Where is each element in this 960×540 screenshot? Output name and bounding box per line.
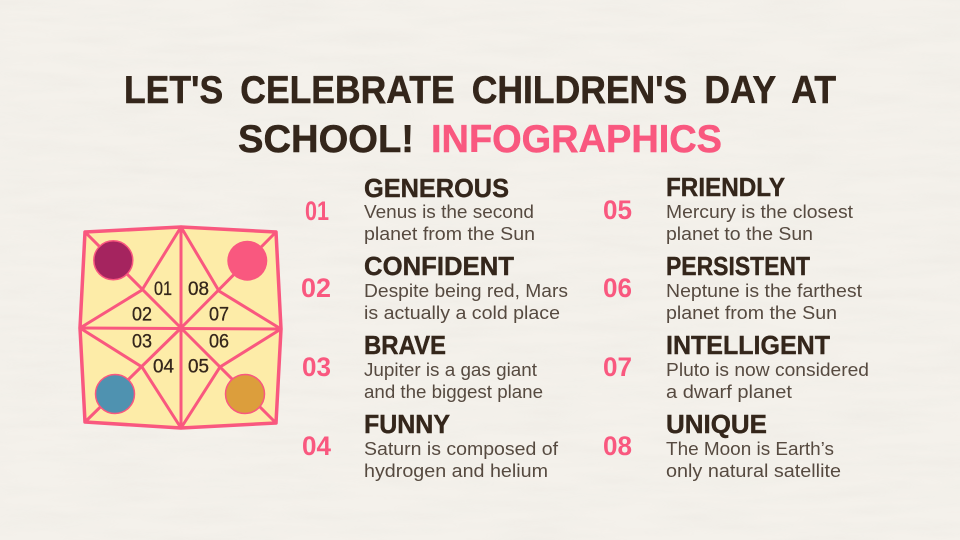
item 08: unique: 08 (603, 431, 632, 461)
item 02: confident: is actually a cold place (364, 302, 560, 323)
diagram numbers: 02 (132, 304, 152, 326)
item 04: funny: FUNNY (364, 409, 450, 439)
item 01: generous: GENEROUS (364, 173, 509, 203)
item 08: unique: The Moon is Earth’s (666, 438, 834, 459)
item 05: friendly (603, 172, 853, 244)
icon: blue circle (96, 374, 134, 414)
title: INFOGRAPHICS (431, 118, 722, 161)
diagram numbers: 04 (153, 356, 174, 378)
item 08: unique: only natural satellite (666, 460, 841, 481)
item 04: funny: hydrogen and helium (364, 460, 548, 481)
item 02: confident: Despite being red, Mars (364, 280, 568, 301)
icon: pink circle (227, 241, 267, 281)
title: LET'S CELEBRATE CHILDREN'S DAY AT (124, 69, 836, 112)
item 08: unique: UNIQUE (666, 409, 767, 439)
icon: orange circle (226, 374, 264, 414)
diagram numbers: 08 (188, 279, 209, 300)
title (124, 69, 836, 161)
item 01: generous: 01 (305, 196, 329, 226)
item 04: funny (302, 409, 559, 481)
item 02: confident: CONFIDENT (364, 251, 514, 281)
item 06: persistent: PERSISTENT (666, 251, 810, 281)
item 03: brave: Jupiter is a gas giant (364, 359, 537, 380)
item 06: persistent: planet from the Sun (666, 302, 837, 323)
item 06: persistent: 06 (603, 273, 632, 303)
item 03: brave (302, 330, 543, 402)
item 06: persistent: Neptune is the farthest (666, 280, 862, 301)
item 08: unique (603, 409, 841, 481)
item 07: intelligent: 07 (603, 352, 632, 382)
item 07: intelligent: Pluto is now considered (666, 359, 869, 380)
item 01: generous: Venus is the second (364, 201, 534, 222)
diagram numbers: 03 (132, 332, 152, 352)
item 01: generous: planet from the Sun (364, 223, 535, 244)
fold lines (80, 227, 281, 428)
icon: purple circle (94, 241, 133, 280)
item 02: confident: 02 (301, 273, 331, 303)
item 05: friendly: FRIENDLY (666, 172, 785, 202)
item 01: generous (305, 173, 535, 244)
item 05: friendly: planet to the Sun (666, 223, 813, 244)
diagram numbers: 05 (188, 356, 209, 378)
item 03: brave: 03 (302, 352, 331, 382)
item 05: friendly: 05 (603, 195, 632, 225)
item 07: intelligent: a dwarf planet (666, 381, 792, 402)
diagram numbers (132, 279, 229, 378)
item 07: intelligent (603, 330, 869, 402)
diagram: folded paper fortune teller (80, 227, 281, 428)
item 02: confident (301, 251, 568, 323)
diagram numbers: 06 (209, 332, 229, 352)
item 06: persistent (603, 251, 862, 323)
title: SCHOOL! (238, 118, 414, 161)
item 05: friendly: Mercury is the closest (666, 201, 853, 222)
diagram numbers: 01 (154, 279, 172, 300)
item 04: funny: 04 (302, 431, 331, 461)
item 04: funny: Saturn is composed of (364, 438, 559, 459)
paper base (80, 227, 281, 428)
item 03: brave: and the biggest plane (364, 381, 543, 402)
item 07: intelligent: INTELLIGENT (666, 330, 830, 360)
item 03: brave: BRAVE (364, 330, 446, 360)
diagram numbers: 07 (209, 304, 229, 326)
